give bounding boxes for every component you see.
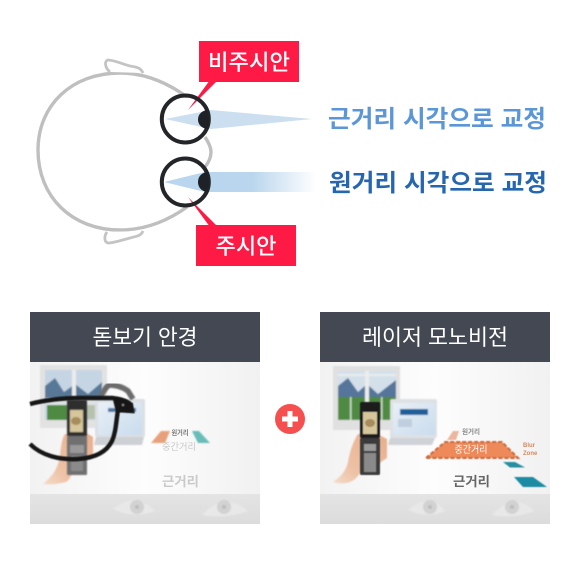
bottom pupil xyxy=(198,172,209,192)
hand xyxy=(333,434,387,483)
far zone xyxy=(447,431,459,440)
label: far correction: 원거리 시각으로 교정 xyxy=(329,170,547,197)
mid label: 중간거리 xyxy=(162,442,196,453)
near label: 근거리 xyxy=(453,474,490,489)
bottom eye ring xyxy=(162,158,209,206)
panel: laser monovision xyxy=(320,312,550,524)
panel heading xyxy=(30,312,260,362)
top pupil xyxy=(198,110,209,129)
photo scene xyxy=(320,362,550,524)
near zone top xyxy=(503,462,525,468)
mid label: 중간거리 xyxy=(454,444,488,456)
phone xyxy=(67,400,87,475)
monitor xyxy=(94,399,145,445)
window xyxy=(40,365,107,428)
middle zone xyxy=(426,442,518,458)
panel heading: 돋보기 안경 xyxy=(92,325,198,350)
panel: reading glasses xyxy=(30,312,260,524)
distance zones xyxy=(151,431,210,443)
hand xyxy=(43,434,93,484)
panel heading: 레이저 모노비전 xyxy=(362,325,508,350)
phone xyxy=(360,402,380,475)
far vision beam xyxy=(164,172,316,192)
bottom ear xyxy=(105,231,143,243)
top eye ring xyxy=(162,96,209,142)
callout: non-dominant eye xyxy=(188,41,299,110)
far label: 원거리 xyxy=(172,428,188,437)
blur zone label: Blur xyxy=(523,443,536,449)
near vision beam xyxy=(165,110,312,129)
callout: dominant eye xyxy=(188,197,296,266)
icon: plus xyxy=(275,404,305,434)
photo scene xyxy=(30,362,260,524)
top ear xyxy=(106,60,143,73)
glasses frame xyxy=(30,396,133,459)
head outline xyxy=(38,73,211,230)
eyes strip xyxy=(30,494,260,524)
blur zone label: Zone xyxy=(523,451,538,457)
monitor xyxy=(388,399,437,445)
label: near correction: 근거리 시각으로 교정 xyxy=(328,106,546,133)
far label: 원거리 xyxy=(462,427,480,436)
glasses temple xyxy=(101,385,133,399)
head outline diagram xyxy=(38,60,316,243)
window xyxy=(333,366,400,430)
eyes strip xyxy=(320,494,550,524)
near label: 근거리 xyxy=(162,474,199,489)
near zone bottom xyxy=(514,477,547,487)
callout: non-dominant eye: 비주시안 xyxy=(208,50,290,75)
callout: dominant eye: 주시안 xyxy=(216,234,276,259)
panel heading xyxy=(320,312,550,362)
